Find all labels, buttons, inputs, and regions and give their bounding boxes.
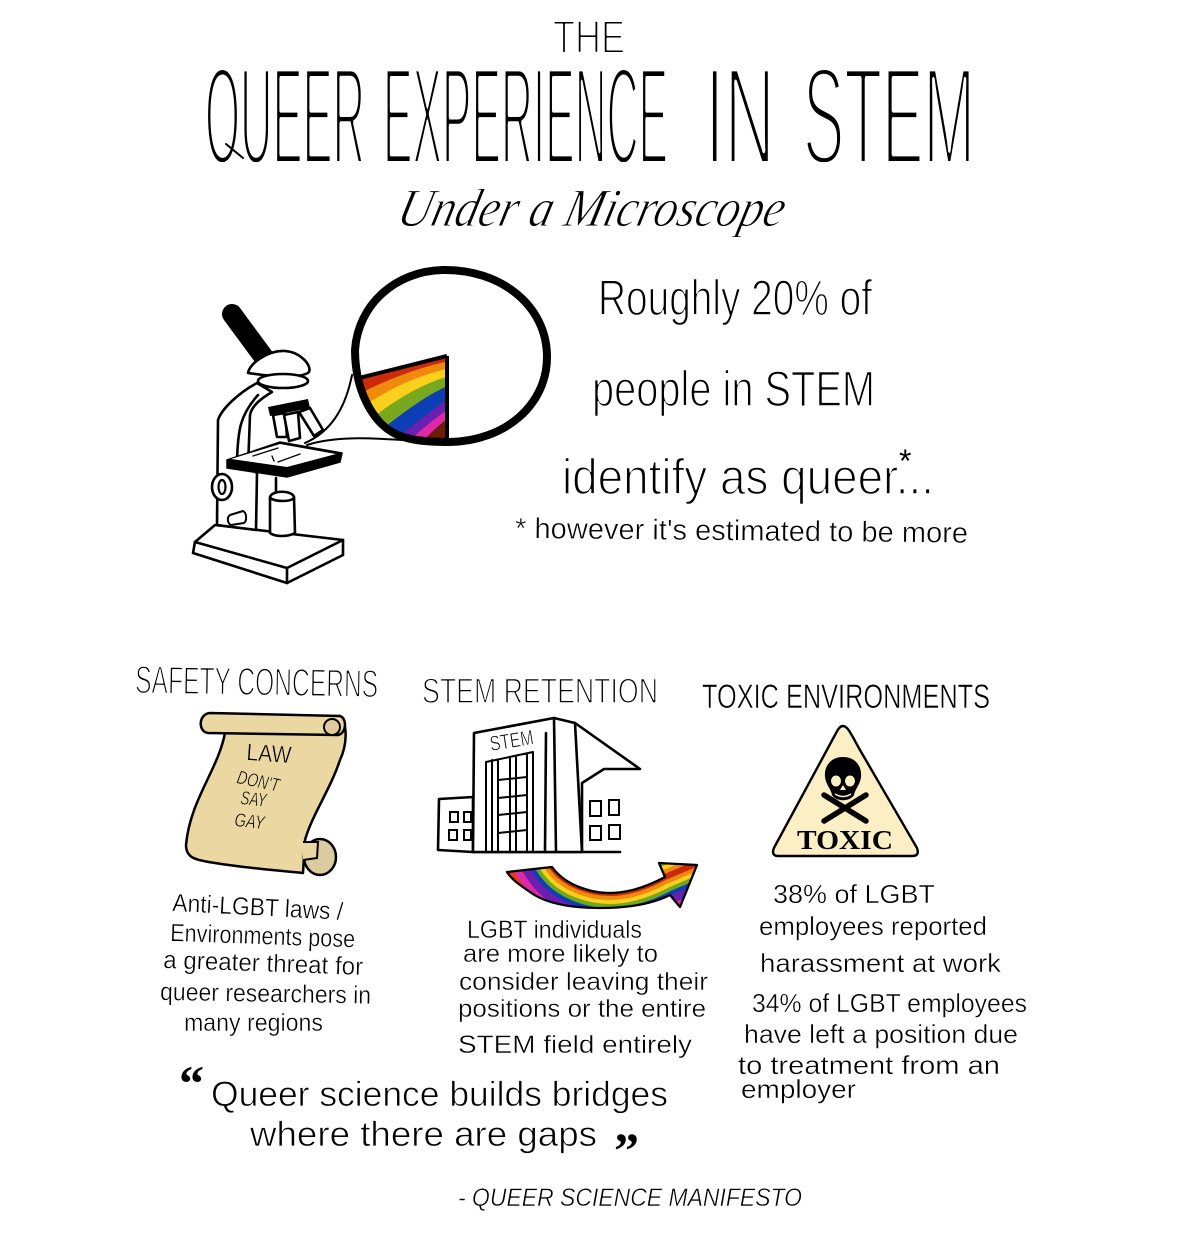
connector lines bbox=[305, 375, 352, 443]
text: stem retention body bbox=[458, 916, 708, 1059]
text: 20 percent statement: identify as queer... bbox=[562, 449, 934, 505]
small knob bbox=[228, 511, 246, 525]
bottom roller bbox=[304, 839, 336, 875]
text: stem retention body: positions or the entire bbox=[458, 995, 706, 1023]
microscope tube bbox=[232, 314, 263, 356]
text: safety concerns body bbox=[160, 889, 371, 1037]
roof and side wing bbox=[473, 723, 640, 852]
text: 20 percent statement: people in STEM bbox=[592, 361, 875, 417]
heading: stem retention: STEM RETENTION bbox=[422, 672, 658, 711]
title: THE: THE bbox=[553, 11, 625, 63]
footnote: however estimated to be more: * however it's estimated to be more bbox=[515, 513, 968, 550]
icon: toxic warning triangle bbox=[773, 726, 918, 856]
text: stem retention body: LGBT individuals bbox=[467, 916, 642, 944]
icon: STEM building bbox=[438, 718, 640, 852]
title: Queer Experience in STEM: IN bbox=[705, 39, 775, 194]
microscope head bbox=[248, 351, 309, 376]
text: toxic environments body: 34% of LGBT employees bbox=[752, 988, 1027, 1018]
door grid bbox=[486, 752, 533, 852]
scroll text: SAY bbox=[239, 788, 268, 812]
skull and crossbones bbox=[824, 757, 866, 821]
text: toxic environments body: employer bbox=[741, 1074, 856, 1104]
scroll text: GAY bbox=[233, 810, 267, 834]
left wing bbox=[438, 797, 473, 852]
top roller bbox=[201, 713, 345, 735]
quote: Queer science builds bridges bbox=[211, 1075, 668, 1114]
heading: toxic environments: TOXIC ENVIRONMENTS bbox=[702, 678, 990, 716]
scroll text: LAW bbox=[246, 739, 293, 769]
scroll text: DON'T bbox=[235, 767, 282, 797]
title: Queer Experience in STEM bbox=[208, 70, 969, 162]
text: safety concerns body: queer researchers in bbox=[160, 978, 371, 1010]
text: toxic environments body: employees reported bbox=[759, 911, 987, 941]
microscope base bbox=[193, 525, 343, 583]
icon: law scroll bbox=[186, 713, 346, 875]
quote: ” bbox=[614, 1122, 639, 1178]
text: 20 percent statement: Roughly 20% of bbox=[598, 270, 872, 326]
text: toxic environments body bbox=[738, 879, 1027, 1104]
windows bbox=[449, 800, 620, 840]
rainbow slice bbox=[362, 358, 445, 438]
text: STEM bbox=[803, 39, 975, 194]
text: stem retention body: are more likely to bbox=[463, 940, 658, 968]
text: toxic environments body: have left a position due bbox=[744, 1019, 1018, 1049]
text: safety concerns body: Anti-LGBT laws / bbox=[172, 889, 344, 926]
heading: safety concerns: SAFETY CONCERNS bbox=[135, 659, 379, 706]
quote attribution: - QUEER SCIENCE MANIFESTO bbox=[458, 1184, 802, 1212]
text: safety concerns body: many regions bbox=[184, 1009, 323, 1037]
toxic label: TOXIC bbox=[797, 825, 893, 855]
quote: “ bbox=[179, 1055, 204, 1111]
lens ring bbox=[355, 270, 547, 442]
building sign: STEM bbox=[488, 726, 535, 756]
text: toxic environments body: harassment at work bbox=[760, 948, 1002, 978]
cylinder bbox=[275, 478, 277, 492]
scroll text bbox=[233, 739, 293, 834]
subtitle: Under a Microscope: Under a Microscope bbox=[392, 178, 793, 238]
microscope objectives bbox=[268, 399, 323, 441]
text: 20 percent statement: * bbox=[899, 443, 911, 479]
quote: where there are gaps bbox=[249, 1115, 597, 1154]
text: 20 percent statement bbox=[562, 270, 934, 505]
scroll body bbox=[186, 716, 346, 873]
quote bbox=[179, 1055, 668, 1178]
microscope stage bbox=[227, 442, 342, 477]
focus knob bbox=[212, 474, 232, 500]
microscope arm bbox=[217, 383, 272, 530]
text: safety concerns body: a greater threat for bbox=[163, 946, 364, 981]
text: toxic environments body: 38% of LGBT bbox=[773, 879, 935, 909]
arrow: rainbow arrow bbox=[506, 862, 698, 910]
text: stem retention body: consider leaving their bbox=[459, 968, 708, 996]
title: Queer Experience in STEM: QUEER bbox=[205, 39, 365, 194]
text: safety concerns body: Environments pose bbox=[170, 919, 356, 953]
text: stem retention body: STEM field entirely bbox=[458, 1031, 693, 1059]
main block bbox=[473, 718, 582, 852]
icon: microscope bbox=[193, 314, 402, 583]
text: toxic environments body: to treatment from an bbox=[738, 1050, 1000, 1080]
chart: pie magnified lens with rainbow slice bbox=[350, 270, 547, 445]
triangle bbox=[773, 726, 918, 856]
